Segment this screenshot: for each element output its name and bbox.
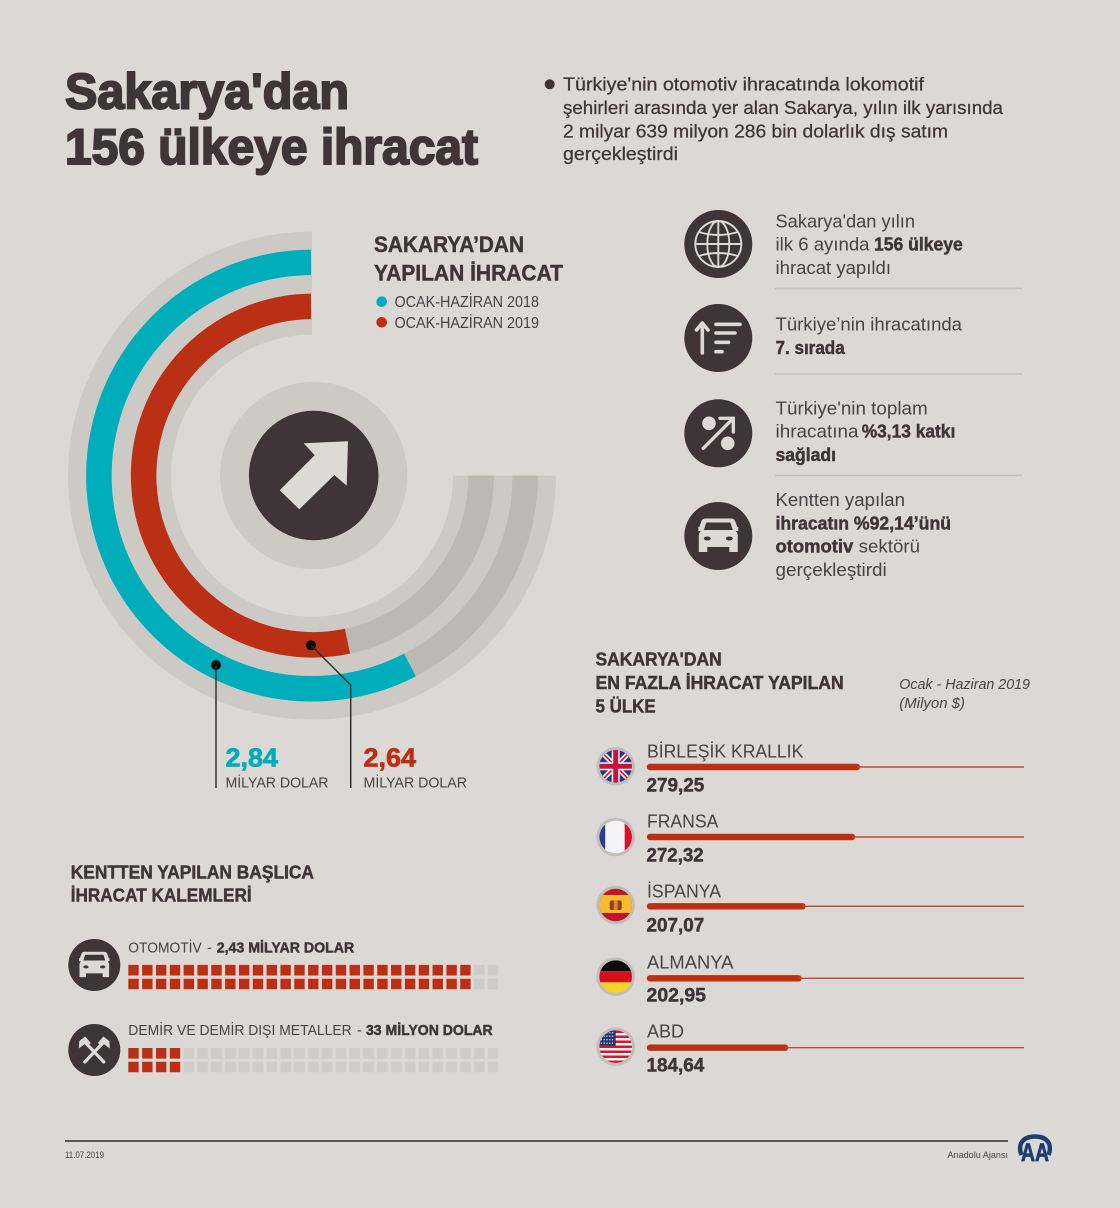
chart title and legend: SAKARYA’DAN	[374, 232, 524, 257]
fact: 156 countries: 156 ülkeye	[874, 235, 963, 255]
icon: French flag	[596, 818, 635, 856]
icon: car	[684, 502, 752, 570]
intro text block: 2 milyar 639 milyon 286 bin dolarlık dış satım	[563, 121, 948, 141]
2019 remaining track	[348, 476, 481, 641]
row: İspanya: 207,07	[646, 916, 704, 937]
row: Birleşik Krallık: 279,25	[646, 776, 705, 797]
fact: 3.13 percent: ihracatına	[776, 422, 860, 442]
row: metal exports: DEMİR VE DEMİR DIŞI METALLER	[128, 1021, 352, 1039]
center arrow icon	[220, 382, 407, 569]
row: automotive exports: -	[207, 941, 212, 957]
intro text block	[545, 75, 1004, 164]
heading: top 5 countries: EN FAZLA İHRACAT YAPILAN	[596, 673, 844, 693]
fact: 7th place: Türkiye’nin ihracatında	[776, 315, 963, 335]
row: automotive exports	[68, 939, 498, 991]
chart title and legend: OCAK-HAZİRAN 2018	[394, 293, 539, 311]
icon: US flag	[596, 1027, 635, 1066]
fact: 156 countries: ilk 6 ayında	[776, 235, 871, 255]
row: Almanya: ALMANYA	[647, 951, 734, 972]
row: ABD	[596, 1021, 1024, 1077]
row: ABD: ABD	[647, 1021, 684, 1042]
fact: 3.13 percent: %3,13 katkı	[862, 422, 955, 442]
row: metal exports: 33 MİLYON DOLAR	[366, 1022, 493, 1039]
fact: automotive share: otomotiv	[776, 537, 853, 557]
row: Fransa	[596, 811, 1024, 867]
intro text block: şehirleri arasında yer alan Sakarya, yılın ilk yarısında	[563, 98, 1004, 118]
row: İspanya	[596, 881, 1024, 937]
icon: UK flag	[596, 747, 635, 786]
callout: 2018 value: MİLYAR DOLAR	[226, 773, 329, 791]
callout: 2019 value	[306, 640, 467, 791]
fact: 3.13 percent: sağladı	[776, 445, 836, 465]
heading: top 5 countries	[596, 649, 844, 716]
chart title and legend: OCAK-HAZİRAN 2019	[394, 314, 539, 332]
icon: German flag	[596, 957, 635, 996]
icon: car	[68, 939, 120, 991]
title	[65, 63, 478, 175]
2018 remaining track	[410, 476, 525, 665]
heading: main export items: KENTTEN YAPILAN BAŞLICA	[71, 861, 314, 882]
icon: crossed hammers	[68, 1024, 120, 1076]
light background band	[120, 283, 505, 668]
footer: 11.07.2019	[65, 1150, 104, 1161]
heading: main export items	[71, 861, 314, 906]
2019 arc	[144, 306, 348, 645]
heading: top 5 countries: SAKARYA'DAN	[596, 649, 722, 669]
icon: Spanish flag	[596, 886, 635, 924]
row: Fransa: 272,32	[646, 846, 704, 867]
icon: ranking arrow	[684, 304, 752, 372]
heading: top 5 countries: 5 ÜLKE	[596, 696, 656, 716]
footer	[65, 1136, 1050, 1167]
row: Birleşik Krallık	[596, 741, 1024, 797]
icon: percent arrow	[684, 399, 752, 467]
title: Sakarya'dan	[65, 63, 349, 119]
fact: 156 countries: ihracat yapıldı	[776, 258, 891, 278]
callout: 2019 value: 2,64	[364, 743, 417, 773]
row: İspanya: İSPANYA	[647, 881, 722, 902]
callout: 2018 value: 2,84	[226, 743, 279, 773]
fact: automotive share: sektörü	[859, 537, 920, 557]
fact: 7th place	[684, 304, 963, 372]
title: 156 ülkeye ihracat	[65, 119, 478, 175]
footer: Anadolu Ajansı	[948, 1150, 1008, 1161]
row: automotive exports: OTOMOTİV	[128, 939, 202, 957]
callout: 2018 value	[211, 660, 329, 791]
chart title and legend: YAPILAN İHRACAT	[374, 260, 564, 285]
fact: 156 countries: Sakarya'dan yılın	[776, 211, 915, 231]
fact: 7th place: 7. sırada	[776, 338, 846, 358]
fact: 3.13 percent: Türkiye'nin toplam	[776, 398, 928, 418]
row: metal exports	[68, 1021, 498, 1076]
heading: main export items: İHRACAT KALEMLERİ	[71, 885, 252, 906]
row: Fransa: FRANSA	[647, 811, 719, 832]
row: Almanya: 202,95	[646, 986, 706, 1007]
unit note: Ocak - Haziran 2019	[899, 676, 1031, 693]
row: automotive exports: 2,43 MİLYAR DOLAR	[217, 940, 355, 957]
logo: Anadolu Ajansı: AA	[1021, 1139, 1049, 1167]
row: Almanya	[596, 956, 1024, 1005]
2018 arc	[99, 262, 410, 689]
fact: 156 countries	[684, 210, 963, 278]
chart title and legend	[374, 232, 564, 332]
row: Birleşik Krallık: BİRLEŞİK KRALLIK	[647, 741, 804, 762]
fact: automotive share: Kentten yapılan	[776, 490, 905, 510]
unit note	[899, 676, 1031, 712]
square bar	[184, 1053, 498, 1067]
fact: automotive share: ihracatın %92,14’ünü	[776, 514, 951, 534]
fact: automotive share	[684, 490, 951, 580]
radial bar chart	[99, 262, 525, 689]
icon: globe	[684, 210, 752, 278]
callout: 2019 value: MİLYAR DOLAR	[364, 773, 467, 791]
row: metal exports: -	[357, 1023, 362, 1039]
square bar	[128, 970, 471, 984]
unit note: (Milyon $)	[899, 695, 965, 712]
intro text block: Türkiye'nin otomotiv ihracatında lokomotif	[563, 75, 925, 95]
fact: 3.13 percent	[684, 398, 955, 467]
row: ABD: 184,64	[646, 1056, 705, 1077]
fact: automotive share: gerçekleştirdi	[776, 560, 887, 580]
intro text block: gerçekleştirdi	[563, 144, 678, 164]
